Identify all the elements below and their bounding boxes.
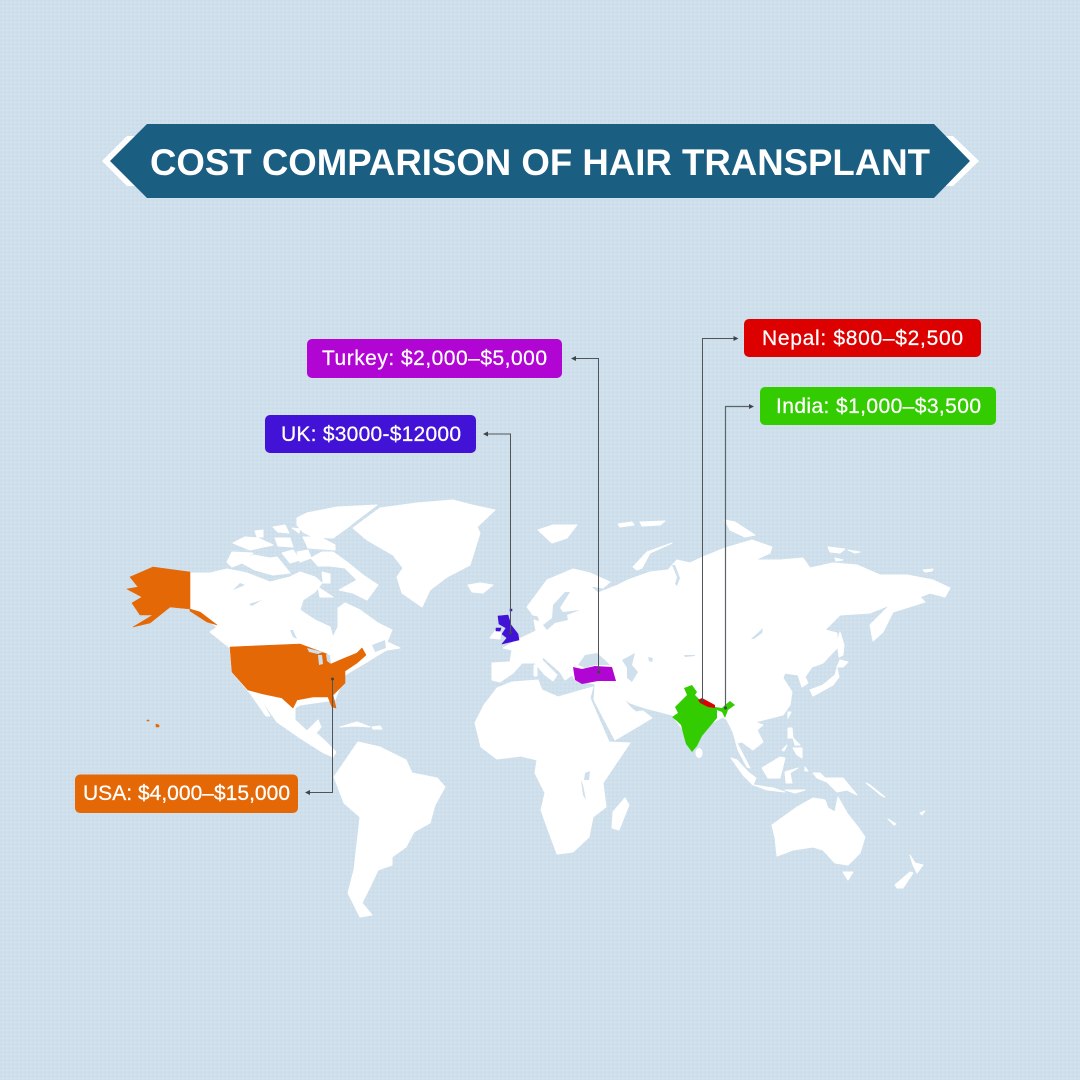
New Zealand	[895, 872, 913, 888]
Black Sea	[578, 653, 610, 668]
Honshu	[810, 668, 839, 696]
Tasmania	[843, 872, 853, 880]
Taiwan	[788, 712, 791, 718]
New Guinea	[813, 773, 857, 795]
Novaya Zemlya	[633, 543, 672, 570]
Lake Balkhash	[684, 655, 695, 657]
Java	[754, 785, 785, 792]
label: USA: USA: $4,000–$15,000	[83, 782, 290, 805]
connector: UK	[483, 432, 512, 634]
country: India	[672, 685, 735, 752]
Aral Sea	[648, 657, 653, 662]
Australia	[772, 797, 865, 865]
South America	[334, 742, 445, 917]
label: UK	[265, 415, 476, 453]
Caspian Sea	[622, 653, 638, 682]
label: Nepal	[744, 319, 981, 357]
country: Nepal	[698, 698, 715, 708]
label: USA	[75, 774, 298, 813]
Russian Arctic islands	[618, 522, 634, 527]
connector: India	[724, 404, 754, 710]
Borneo	[762, 757, 785, 778]
Greenland	[353, 500, 495, 607]
label: UK: UK: $3000-$12000	[281, 423, 461, 446]
Lake Winnipeg	[290, 630, 297, 639]
Ob Gulf	[672, 565, 680, 586]
banner right chevron	[938, 136, 979, 186]
Lake Tanganyika	[581, 780, 586, 800]
Gulf of St Lawrence	[372, 640, 386, 652]
country: UK	[496, 609, 519, 644]
Sakhalin	[837, 632, 844, 657]
Africa	[475, 680, 630, 854]
label: India: India: $1,000–$3,500	[776, 395, 981, 418]
banner ribbon	[110, 124, 970, 198]
landmasses	[190, 500, 950, 917]
country: USA	[127, 567, 366, 727]
Great Bear Lake	[233, 583, 245, 590]
Madagascar	[612, 798, 629, 830]
Lake Victoria	[584, 771, 590, 780]
Great Lakes	[307, 648, 331, 665]
Ellesmere Island	[297, 505, 377, 538]
Alaska	[127, 567, 217, 627]
title: COST COMPARISON OF HAIR TRANSPLANT	[150, 142, 930, 183]
Iceland	[468, 583, 493, 593]
Hawaii	[156, 724, 159, 727]
Pacific islands	[866, 783, 885, 797]
Hokkaido	[837, 660, 848, 667]
Eurasia	[492, 540, 950, 768]
world map	[127, 500, 950, 917]
Philippines	[788, 728, 793, 738]
Svalbard	[538, 525, 577, 543]
Baltic Sea	[543, 592, 580, 630]
Arctic islands	[242, 555, 290, 575]
label: Turkey	[307, 339, 562, 378]
connector: Turkey	[571, 356, 600, 675]
Sri Lanka	[696, 748, 702, 758]
seas and lakes	[233, 565, 763, 800]
banner left chevron	[102, 136, 142, 186]
label: Turkey: Turkey: $2,000–$5,000	[322, 347, 547, 370]
connector: Nepal	[701, 336, 738, 702]
Lake Baikal	[751, 628, 763, 639]
North America	[190, 569, 400, 757]
Ireland	[490, 631, 501, 639]
title banner	[102, 124, 979, 198]
label: Nepal: Nepal: $800–$2,500	[762, 327, 963, 350]
Sumatra	[731, 758, 756, 785]
contiguous USA	[230, 644, 366, 708]
Corsica and Sardinia	[534, 665, 537, 676]
connector: USA	[305, 678, 334, 795]
Sulawesi	[785, 768, 798, 783]
Baffin Island	[311, 552, 378, 600]
label: India	[760, 387, 996, 425]
Caribbean	[340, 722, 370, 727]
Great Slave Lake	[249, 600, 262, 606]
country: Turkey	[573, 666, 616, 684]
